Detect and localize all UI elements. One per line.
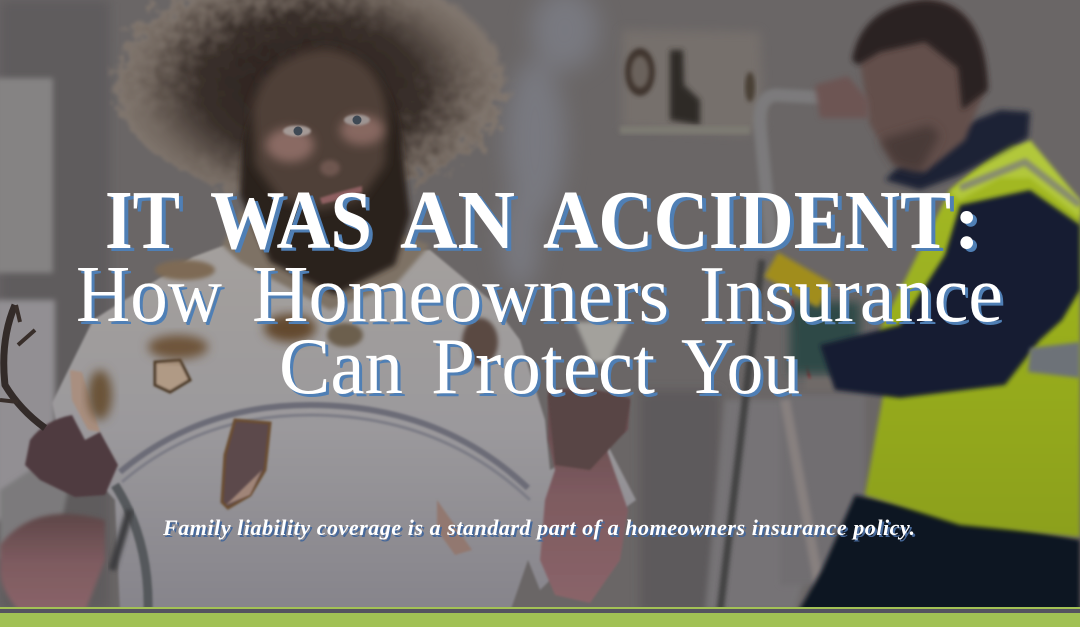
title xyxy=(76,174,1006,414)
man: left sleeve xyxy=(0,467,70,560)
worker vest xyxy=(865,140,1080,537)
title line 3: Protect xyxy=(434,326,658,414)
man: sweater stripes xyxy=(120,405,528,488)
man: right arm with burnt bulb xyxy=(540,322,630,603)
bottom green bar xyxy=(0,607,1080,627)
title line 1: WAS xyxy=(210,174,372,267)
title line 1: : xyxy=(958,181,984,268)
title line 2: Homeowners xyxy=(252,251,669,339)
title line 2: Insurance xyxy=(702,254,1006,342)
title line 1: ACCIDENT xyxy=(543,174,951,267)
multimeter xyxy=(764,252,832,308)
conduit pipe and ladder xyxy=(720,95,880,612)
worker trousers xyxy=(798,495,1080,612)
title line 3 xyxy=(279,323,803,414)
title line 3: Can xyxy=(279,323,403,411)
title line 1: ACCIDENT xyxy=(547,177,955,270)
title line 1: IT xyxy=(105,174,180,267)
title line 2: Insurance xyxy=(699,251,1003,339)
worker in high-visibility jacket xyxy=(764,0,1080,612)
man: body shirt xyxy=(0,210,636,612)
title line 1: AN xyxy=(400,174,515,267)
subtitle: Family liability coverage is a standard part of a homeowners insurance policy. xyxy=(164,517,917,542)
man: left hand with cable xyxy=(0,305,148,612)
smoke xyxy=(500,0,599,290)
title line 3: You xyxy=(684,326,803,414)
title line 2: How xyxy=(76,251,222,339)
electrical cable xyxy=(4,305,45,428)
man: shirt burns xyxy=(222,420,270,508)
man: mouth xyxy=(320,186,362,204)
title line 3: Protect xyxy=(431,323,655,411)
subtitle: Family liability coverage is a standard part of a homeowners insurance policy. xyxy=(162,515,915,540)
title line 3: You xyxy=(681,323,800,411)
title line 2: How xyxy=(79,254,225,342)
man: wild hair xyxy=(110,0,510,200)
title line 1: : xyxy=(954,178,980,265)
title line 2 xyxy=(76,251,1006,342)
title line 1 xyxy=(105,174,984,270)
burnt wall socket xyxy=(620,30,764,135)
title line 1: AN xyxy=(404,177,519,270)
title line 1: WAS xyxy=(214,177,376,270)
title line 2: Homeowners xyxy=(255,254,672,342)
worker jacket and sleeve xyxy=(820,190,1080,398)
man: collar xyxy=(222,210,430,310)
man: cheeks and eyes xyxy=(266,128,314,162)
title line 3: Can xyxy=(282,326,406,414)
worker head xyxy=(858,0,985,172)
title line 1: IT xyxy=(109,177,184,270)
man: head and beard xyxy=(240,48,410,295)
worker hand xyxy=(815,76,868,118)
